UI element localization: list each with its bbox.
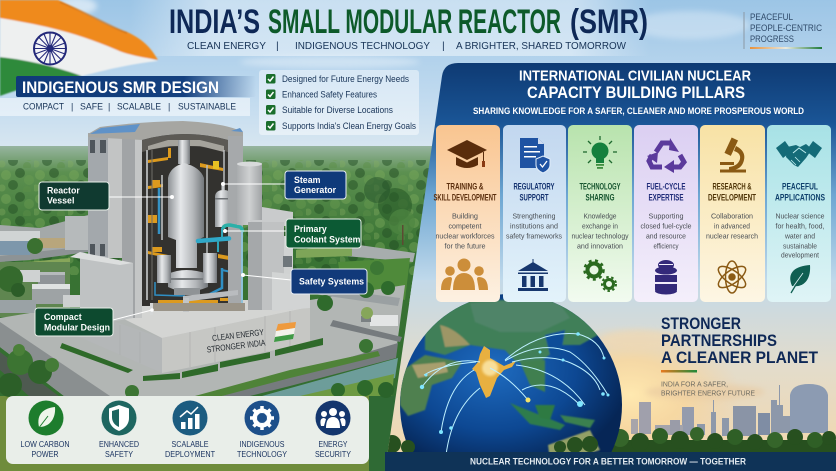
flag of India — [0, 0, 158, 96]
title: INDIA’S — [169, 3, 260, 41]
checklist — [259, 70, 419, 135]
card: peaceful applications: PEACEFUL — [782, 182, 818, 192]
card: peaceful applications — [767, 125, 831, 302]
globe — [400, 294, 622, 460]
card: peaceful applications: Nuclear science — [776, 212, 824, 220]
site trees — [0, 238, 395, 399]
ground: curving road — [330, 320, 402, 342]
callout: reactor vessel: Reactor — [47, 186, 80, 196]
card: fuel-cycle expertise — [634, 125, 698, 302]
heading: indigenous SMR design: INDIGENOUS SMR DESIGN — [22, 78, 219, 97]
icon: growth chart — [172, 400, 208, 436]
globe landmasses — [400, 298, 600, 460]
card: research and development: RESEARCH & — [712, 182, 752, 192]
scaffolds — [148, 148, 240, 303]
icon: fuel barrel — [655, 260, 677, 294]
card: technology sharing: TECHNOLOGY — [580, 182, 621, 192]
icon: document and shield — [520, 138, 550, 173]
design attributes: | — [71, 102, 73, 112]
reactor building cutaway — [60, 121, 323, 381]
card: training and skill development: for the future — [444, 242, 486, 250]
icon: light bulb — [583, 136, 617, 169]
wall sign: CLEAN ENERGY — [212, 327, 265, 343]
callout: primary coolant system — [223, 219, 361, 248]
icon: gears — [584, 260, 616, 291]
card: regulatory support: institutions and — [510, 222, 558, 230]
motto block: PEOPLE-CENTRIC — [750, 23, 823, 33]
benefit labels: SECURITY — [315, 450, 352, 459]
benefit labels: DEPLOYMENT — [165, 450, 215, 459]
card: regulatory support — [503, 125, 566, 302]
benefit labels: INDIGENOUS — [240, 440, 284, 449]
subtitle — [187, 41, 626, 52]
card: fuel-cycle expertise: EXPERTISE — [648, 192, 684, 204]
tagline — [661, 380, 755, 398]
subtitle: | — [276, 41, 279, 52]
callout: reactor vessel — [39, 182, 174, 210]
accent bar — [661, 370, 697, 372]
callout: compact modular design: Compact — [44, 312, 82, 322]
callout: compact modular design — [35, 308, 154, 336]
main containment — [88, 133, 108, 258]
checklist: Suitable for Diverse Locations — [282, 105, 394, 115]
title: SMALL MODULAR REACTOR — [268, 3, 561, 41]
design attributes — [23, 102, 236, 112]
benefit labels — [20, 440, 352, 459]
card: training and skill development: TRAINING & — [446, 182, 484, 192]
card: regulatory support: Strengthening — [512, 212, 556, 220]
arc nodes — [420, 332, 610, 434]
callout: primary coolant system: Coolant System — [294, 234, 361, 244]
benefit labels: SCALABLE — [172, 440, 208, 449]
panel header text — [473, 68, 804, 116]
checklist: Enhanced Safety Features — [282, 90, 378, 100]
benefit labels: POWER — [32, 450, 59, 459]
icon: recycle — [647, 138, 684, 173]
design attributes: | — [108, 102, 110, 112]
card: regulatory support: SUPPORT — [520, 192, 549, 204]
card: training and skill development: nuclear workforces — [436, 232, 495, 240]
icon: leaf — [790, 265, 810, 293]
subtitle: A BRIGHTER, SHARED TOMORROW — [456, 41, 626, 52]
panel header text: INTERNATIONAL CIVILIAN NUCLEAR — [519, 68, 751, 84]
card: research and development: nuclear research — [706, 232, 758, 240]
panel: right side — [383, 63, 836, 465]
icon: team — [441, 258, 488, 290]
card: technology sharing — [568, 125, 632, 302]
ground: lawn patches — [28, 258, 70, 273]
callout: steam generator: Generator — [294, 185, 337, 195]
benefit labels: ENHANCED — [99, 440, 139, 449]
side tower — [228, 136, 243, 306]
header backdrop — [130, 0, 650, 56]
card: research and development: in advanced — [714, 222, 750, 230]
callout: compact modular design: Modular Design — [44, 322, 110, 332]
pipework — [147, 150, 240, 300]
benefit labels: TECHNOLOGY — [237, 450, 288, 459]
card: peaceful applications: water and — [784, 232, 815, 240]
icon: shield — [102, 400, 136, 436]
heading: indigenous SMR design — [0, 76, 256, 116]
ground: perimeter wall — [0, 322, 110, 396]
icon: people — [316, 400, 350, 436]
background: forest and site — [0, 146, 440, 471]
lower tanks — [157, 253, 217, 283]
tagline: BRIGHTER ENERGY FUTURE — [661, 388, 755, 398]
icon: atom — [715, 261, 749, 293]
coolant pipes — [198, 225, 242, 303]
card: fuel-cycle expertise: efficiency — [654, 242, 679, 250]
card: fuel-cycle expertise: and resource — [646, 232, 686, 240]
benefit labels: LOW CARBON — [20, 440, 70, 449]
ground: far service road and fence — [345, 243, 415, 262]
tree line — [612, 427, 836, 452]
card: training and skill development: competent — [448, 222, 482, 230]
annex left — [70, 252, 133, 322]
title: (SMR) — [570, 3, 648, 41]
heading: stronger partnerships: PARTNERSHIPS — [661, 332, 777, 350]
storage tank — [237, 162, 262, 225]
callout: reactor vessel: Vessel — [47, 196, 74, 206]
ground: left access road — [0, 246, 88, 262]
card: fuel-cycle expertise: FUEL-CYCLE — [646, 182, 686, 192]
tagline: INDIA FOR A SAFER, — [661, 380, 728, 388]
icon: institution — [518, 259, 548, 291]
card: research and development: DEVELOPMENT — [708, 192, 756, 204]
callout: safety systems: Safety Systems — [299, 276, 364, 286]
icon: graduation cap — [447, 140, 487, 168]
footer bar — [385, 452, 836, 471]
background: sky — [0, 0, 836, 160]
subtitle: CLEAN ENERGY — [187, 41, 266, 52]
small site buildings — [0, 216, 398, 326]
card: regulatory support: REGULATORY — [514, 182, 555, 192]
card: technology sharing: nuclear technology — [572, 232, 629, 240]
card: training and skill development: SKILL DEVELOPMENT — [434, 192, 497, 204]
benefit labels: ENERGY — [318, 440, 348, 449]
skyline — [631, 384, 828, 436]
design attributes: SCALABLE — [117, 102, 161, 112]
India highlighted — [472, 346, 516, 398]
ground: plaza — [0, 285, 405, 396]
design attributes: | — [168, 102, 170, 112]
callout: safety systems — [241, 269, 367, 294]
wall sign — [206, 327, 266, 355]
icon: ashoka chakra — [34, 32, 66, 64]
base plinth — [70, 300, 310, 373]
card: fuel-cycle expertise: Supporting — [648, 212, 684, 220]
icon: low carbon leaf — [28, 400, 64, 436]
card: technology sharing: Knowledge — [584, 212, 616, 220]
tower windows — [90, 140, 106, 256]
card: technology sharing: SHARING — [586, 192, 614, 204]
panel header text: CAPACITY BUILDING PILLARS — [527, 84, 745, 102]
motto block — [744, 12, 823, 49]
motto block: PEACEFUL — [750, 12, 793, 22]
reactor vessel — [168, 140, 208, 295]
subtitle: INDIGENOUS TECHNOLOGY — [295, 41, 430, 52]
panel: benefits strip — [6, 396, 369, 464]
callout: steam generator — [221, 171, 346, 199]
callout: steam generator: Steam — [294, 175, 321, 185]
card: training and skill development: Building — [452, 212, 478, 220]
motto block: PROGRESS — [750, 34, 794, 44]
steam generator unit — [215, 183, 232, 227]
card: research and development — [700, 125, 765, 302]
design attributes: SUSTAINABLE — [178, 102, 236, 112]
planting beds — [60, 338, 323, 381]
subtitle: | — [442, 41, 445, 52]
heading: stronger partnerships: A CLEANER PLANET — [661, 349, 818, 367]
lower header pipe — [150, 290, 245, 315]
card: research and development: Collaboration — [711, 212, 753, 220]
card: peaceful applications: development — [781, 250, 820, 260]
checklist: Supports India's Clean Energy Goals — [282, 121, 417, 131]
icon: microscope — [720, 137, 746, 172]
partnership arcs — [422, 334, 608, 455]
annex right — [248, 207, 310, 311]
design attributes: SAFE — [80, 102, 103, 112]
wall flag — [274, 322, 296, 342]
card: regulatory support: safety frameworks — [506, 232, 562, 240]
icon: handshake — [776, 141, 822, 167]
card: technology sharing: and innovation — [577, 242, 623, 250]
card: training and skill development — [434, 125, 500, 302]
card: fuel-cycle expertise: closed fuel-cycle — [640, 222, 692, 230]
footer bar: NUCLEAR TECHNOLOGY FOR A BETTER TOMORROW — TOGETHER — [470, 456, 747, 466]
interior cutaway — [142, 134, 228, 306]
heading: stronger partnerships — [661, 315, 818, 367]
checklist: Designed for Future Energy Needs — [282, 74, 410, 84]
wall sign: STRONGER INDIA — [206, 337, 266, 355]
card: peaceful applications: sustainable — [783, 242, 817, 250]
heading: stronger partnerships: STRONGER — [661, 315, 741, 333]
design attributes: COMPACT — [23, 102, 65, 112]
foreground trees — [388, 435, 598, 452]
title — [169, 3, 648, 41]
card: peaceful applications: for health, food, — [776, 222, 824, 230]
card: technology sharing: exchange in — [582, 222, 618, 230]
roof — [88, 121, 243, 140]
icon: gear — [244, 400, 280, 436]
benefit labels: SAFETY — [105, 450, 134, 459]
callout: primary coolant system: Primary — [294, 224, 327, 234]
